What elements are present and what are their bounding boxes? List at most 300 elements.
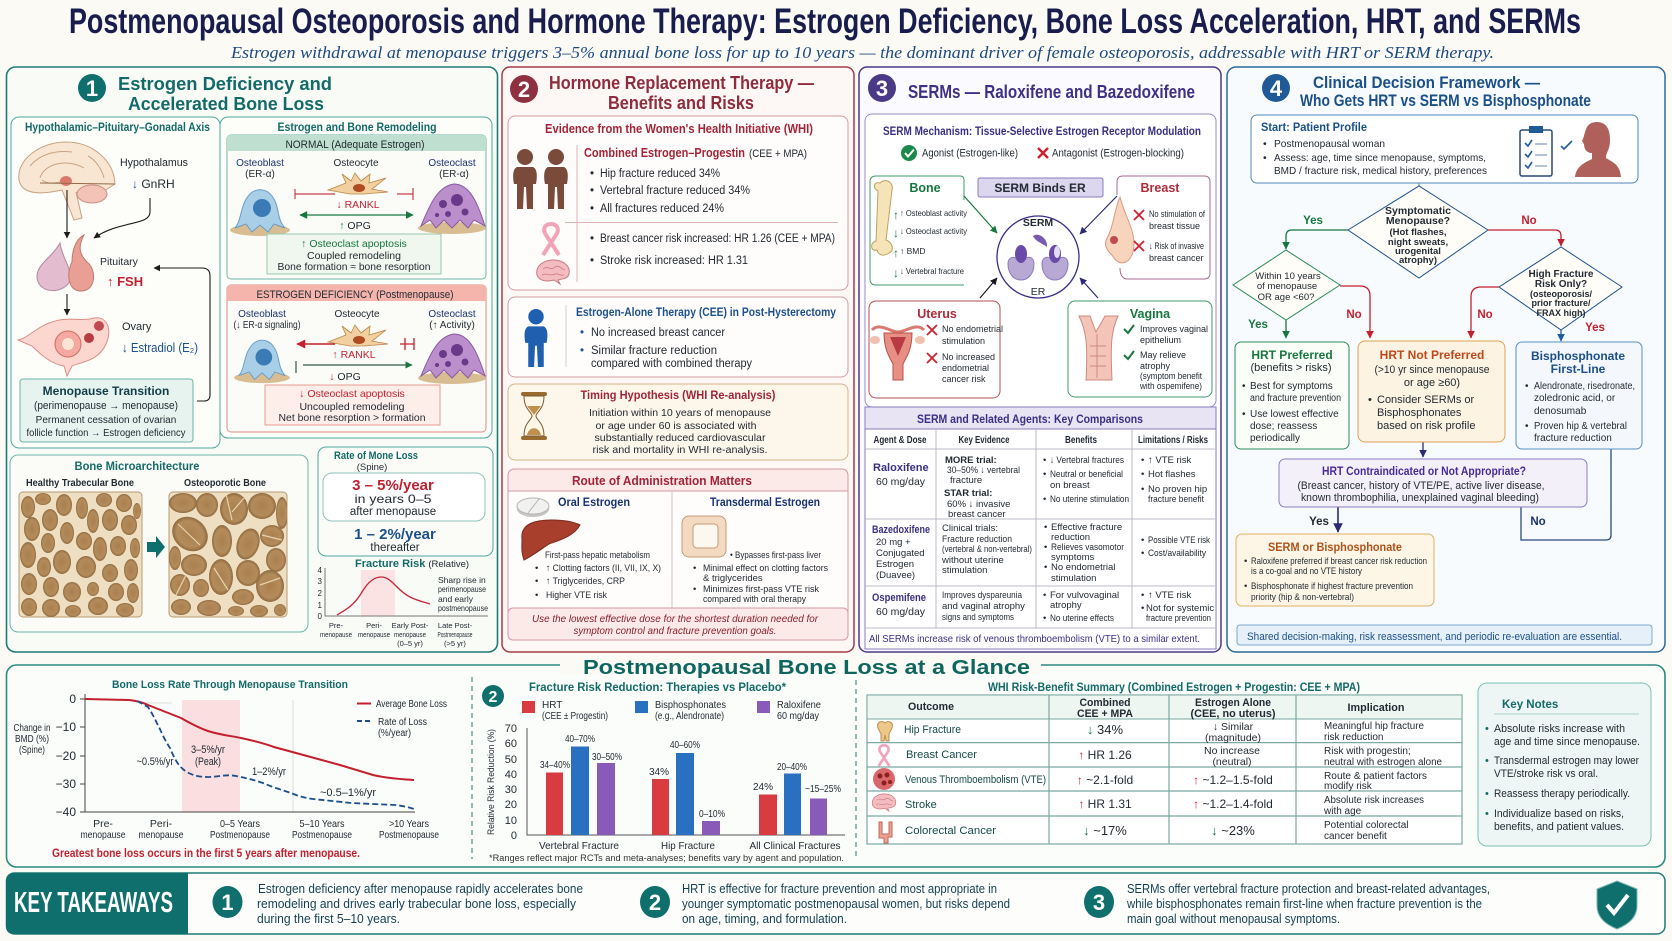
breast tissue card [1106, 176, 1210, 279]
bar chart: fracture risk reduction: 34% [649, 767, 669, 778]
bone tissue card: ↓ Osteoclast activity [900, 226, 968, 236]
icon: brain [19, 142, 115, 220]
WHI risk-benefit table: ↓ 34% [1087, 722, 1124, 737]
WHI risk-benefit table: Potential colorectal [1324, 820, 1408, 831]
fracture risk chart: Early Post- [392, 621, 429, 630]
decision: high fracture risk: High Fracture [1528, 269, 1594, 280]
key notes box: age and time since menopause. [1494, 736, 1640, 748]
rate of bone loss box: 3 – 5%/year [352, 477, 434, 494]
normal state: ↑ OPG [339, 220, 371, 232]
bone tissue card: Bone [909, 181, 941, 195]
bar chart: fracture risk reduction: 40 [505, 769, 517, 781]
normal state: ↓ RANKL [336, 199, 380, 211]
table row: ospemifene: and vaginal atrophy [942, 601, 1025, 612]
flowchart labels: Yes [1309, 516, 1329, 528]
takeaway 3: main goal without menopausal symptoms. [1127, 911, 1340, 926]
SERM binds ER label: SERM Binds ER [994, 181, 1086, 195]
SERM binds ER label [978, 178, 1103, 197]
table rows: Stroke [905, 799, 937, 811]
deficiency state: ESTROGEN DEFICIENCY (Postmenopause) [256, 289, 454, 301]
decision: within 10 years: OR age <60? [1258, 292, 1314, 303]
route of administration box: ↑ Triglycerides, CRP [546, 576, 625, 587]
pituitary label: ↑ FSH [107, 274, 143, 289]
SERM comparison table: Key Evidence [958, 434, 1010, 446]
rate of bone loss box: after menopause [350, 506, 436, 518]
takeaway 2: 2 [649, 890, 661, 915]
decision: symptomatic menopause: (Hot flashes, [1389, 227, 1447, 238]
SERM or bisphosphonate box: is a co-goal and no VTE history [1251, 566, 1362, 577]
outcome: bisphosphonate first-line: fracture reduction [1534, 433, 1612, 444]
table row: bazedoxifene: Relieves vasomotor [1051, 542, 1124, 553]
table row: ospemifene: fracture prevention [1146, 613, 1211, 624]
rate of bone loss box: in years 0–5 [354, 492, 432, 506]
patient profile box: Postmenopausal woman [1274, 138, 1385, 150]
decision: within 10 years: of menopause [1257, 281, 1317, 292]
key notes box: Key Notes [1502, 699, 1558, 711]
takeaway 2: younger symptomatic postmenopausal women, but risks depend [682, 896, 1010, 911]
outcome: bisphosphonate first-line [1516, 342, 1642, 449]
fracture risk chart: Peri- [366, 621, 382, 630]
timing hypothesis box [508, 384, 848, 460]
fracture risk chart: 3 [318, 577, 323, 586]
healthy trabecular bone image [19, 492, 142, 617]
fracture risk chart: 2 [318, 589, 323, 598]
normal state [227, 135, 486, 279]
normal state: (ER-α) [245, 169, 275, 180]
key notes box: • [1485, 788, 1489, 800]
bar chart: fracture risk reduction: All Clinical Fractures [750, 840, 840, 852]
flowchart labels: Yes [1248, 319, 1268, 331]
rate of bone loss box: (Spine) [357, 462, 387, 473]
panel 1 heading: Estrogen Deficiency and [118, 74, 332, 94]
bone tissue card: ↑ BMD [900, 246, 926, 256]
menopause transition box: Menopause Transition [43, 384, 169, 398]
table row: ospemifene: ↑ VTE risk [1148, 590, 1192, 601]
WHI evidence box: Combined Estrogen–Progestin [584, 146, 745, 160]
table row: bazedoxifene: Cost/availability [1148, 548, 1206, 559]
table row: ospemifene: • [1043, 590, 1046, 601]
line chart legend: (%/year) [378, 728, 411, 739]
HRT contraindicated box [1279, 459, 1587, 507]
table row: bazedoxifene: • [1044, 542, 1047, 553]
deficiency state: (↑ Activity) [429, 320, 475, 331]
WHI risk-benefit table: ↓ ~23% [1211, 823, 1255, 838]
table row: ospemifene: • [1141, 603, 1144, 614]
line chart: bone loss rate: Pre- [93, 818, 113, 830]
outcome: HRT preferred: • [1242, 381, 1246, 392]
table row: bazedoxifene: symptoms [1051, 552, 1095, 563]
patient profile box: Assess: age, time since menopause, symptoms, [1274, 152, 1486, 164]
outcome: bisphosphonate first-line: Bisphosphonate [1531, 349, 1625, 363]
table row: bazedoxifene: • [1141, 535, 1144, 546]
osteoporotic bone image [165, 492, 288, 617]
deficiency state: ↓ OPG [329, 371, 361, 383]
flowchart labels: Yes [1303, 215, 1323, 227]
bar chart: fracture risk reduction: 34–40% [540, 760, 570, 771]
table rows: Breast Cancer [906, 749, 977, 761]
table row: raloxifene: Neutral or beneficial [1050, 469, 1123, 480]
table row: bazedoxifene: stimulation [1051, 573, 1096, 584]
line chart: bone loss rate: menopause [138, 829, 184, 841]
bone microarchitecture box: Bone Microarchitecture [74, 459, 200, 473]
icon: hourglass [521, 392, 547, 440]
table row: ospemifene: No uterine effects [1050, 613, 1114, 624]
WHI risk-benefit table: ↓ Similar [1213, 721, 1254, 733]
WHI risk-benefit table: Risk with progestin; [1324, 746, 1411, 757]
SERM or bisphosphonate box: • [1244, 556, 1247, 567]
line chart: bone loss rate: 0–5 Years [220, 818, 260, 830]
decision: within 10 years [1233, 250, 1340, 320]
WHI risk-benefit table: ↑ HR 1.26 [1078, 748, 1132, 762]
bar chart: fracture risk reduction: 20–40% [777, 762, 807, 773]
hypothalamus label: ↓ GnRH [132, 177, 175, 191]
decision: high fracture risk: FRAX high) [1536, 308, 1586, 318]
table row: ospemifene: signs and symptoms [942, 612, 1014, 623]
line chart: bone loss rate: BMD (%) [15, 734, 49, 745]
outcome: HRT preferred: HRT Preferred [1251, 348, 1333, 362]
rate of bone loss box: Rate of Mone Loss [334, 450, 418, 462]
arrows to receptor [964, 196, 1117, 298]
table header: CEE + MPA [1077, 708, 1133, 720]
route of administration box: • [693, 563, 696, 574]
takeaway 3: SERMs offer vertebral fracture protection and breast-related advantages, [1127, 881, 1490, 896]
bone tissue card: ↑ Osteoblast activity [900, 208, 968, 218]
table rows [904, 724, 1046, 837]
table row: bazedoxifene: Bazedoxifene [872, 524, 930, 536]
route of administration box: • [535, 590, 538, 601]
panel 1 badge: 1 [86, 76, 98, 101]
SERM or bisphosphonate box: priority (hip & non-vertebral) [1251, 592, 1354, 603]
breast tissue card: breast cancer [1149, 253, 1204, 263]
WHI risk-benefit table: (magnitude) [1205, 732, 1261, 744]
thin trabecular strands [176, 494, 282, 595]
patient profile box: Start: Patient Profile [1261, 120, 1367, 134]
table row: ospemifene: • [1043, 613, 1046, 624]
hypothalamus label [120, 157, 188, 191]
key notes box: Individualize based on risks, [1494, 808, 1624, 820]
takeaway 1: 1 [221, 890, 234, 915]
arrows [67, 190, 150, 315]
icon: vagina [1079, 316, 1118, 380]
key notes box: Transdermal estrogen may lower [1494, 755, 1639, 767]
route of administration box [508, 469, 848, 640]
decision: symptomatic menopause: Menopause? [1386, 215, 1450, 227]
flowchart labels: No [1477, 309, 1493, 321]
line chart: bone loss rate: 3–5%/yr [191, 744, 225, 756]
icon: breast [1106, 197, 1134, 263]
key notes box: • [1485, 808, 1489, 820]
outcome: bisphosphonate first-line: Proven hip & vertebral [1534, 421, 1627, 432]
table header: Implication [1348, 702, 1405, 714]
fracture risk chart: menopause [320, 630, 352, 639]
arrow: healthy to osteoporotic [147, 536, 165, 558]
outcome: HRT not preferred: Bisphosphonates [1377, 407, 1462, 419]
table row: raloxifene: • [1141, 469, 1144, 480]
line chart: bone loss rate: 5–10 Years [300, 818, 344, 830]
table row: raloxifene [873, 455, 1207, 520]
line chart: bone loss rate: Postmenopause [292, 829, 352, 841]
SERM comparison table: SERM and Related Agents: Key Comparisons [917, 412, 1143, 426]
bar chart: fracture risk reduction: 10 [505, 815, 517, 827]
uterus card: No increased [942, 352, 995, 362]
table row: bazedoxifene: • [1044, 562, 1047, 573]
table row: raloxifene: on breast [1050, 480, 1090, 491]
menopause transition box: follicle function → Estrogen deficiency [26, 428, 186, 439]
table row: bazedoxifene: No endometrial [1051, 562, 1115, 573]
WHI risk-benefit table: ↑ ~1.2–1.5-fold [1193, 773, 1273, 787]
route of administration box: Oral Estrogen [558, 495, 630, 509]
line chart: bone loss rate: ~0.5–1%/yr [320, 787, 376, 799]
fracture risk chart: (>5 yr) [444, 639, 466, 648]
bone tissue card: ↑ [893, 246, 899, 260]
table rows: Colorectal Cancer [905, 825, 996, 837]
line chart: bone loss rate: >10 Years [389, 818, 429, 830]
route of administration box: Higher VTE risk [546, 590, 607, 601]
bone tissue card: ↓ [893, 226, 899, 240]
route of administration box: • Bypasses first-pass liver [730, 550, 821, 561]
fracture risk chart: 0 [318, 612, 323, 621]
table row: bazedoxifene: without uterine [941, 555, 1004, 566]
table row: ospemifene: • [1141, 590, 1144, 601]
outcome: HRT preferred: • [1242, 409, 1246, 420]
icon: woman profile [1575, 122, 1621, 177]
WHI evidence box: Breast cancer risk increased: HR 1.26 (CEE + MPA) [600, 233, 835, 245]
table row: raloxifene: 60% ↓ invasive [947, 499, 1010, 510]
decision: symptomatic menopause: atrophy) [1399, 255, 1437, 266]
bar chart footnote: *Ranges reflect major RCTs and meta-analyses; benefits vary by agent and population. [489, 853, 844, 864]
table row: bazedoxifene: 20 mg + [876, 537, 911, 548]
table row: raloxifene: ↓ Vertebral fractures [1050, 455, 1124, 466]
table row: raloxifene: 30–50% ↓ vertebral [947, 465, 1020, 476]
normal state: NORMAL (Adequate Estrogen) [286, 139, 424, 151]
outcome: HRT preferred: Best for symptoms [1250, 381, 1333, 392]
decision: symptomatic menopause: night sweats, [1388, 237, 1448, 248]
line chart: bone loss rate: Postmenopause [210, 829, 270, 841]
decision: within 10 years: Within 10 years [1255, 271, 1321, 282]
normal state: (ER-α) [439, 169, 469, 180]
flowchart labels: Yes [1585, 322, 1605, 334]
table row: ospemifene: Improves dyspareunia [942, 590, 1023, 601]
vagina card: Vagina [1130, 307, 1171, 321]
timing hypothesis box: substantially reduced cardiovascular [594, 432, 766, 444]
outcome: bisphosphonate first-line: denosumab [1534, 406, 1587, 417]
legend: agonist, antagonist: Antagonist (Estrogen-blocking) [1052, 148, 1184, 160]
table row: raloxifene: No proven hip [1148, 484, 1207, 495]
WHI risk-benefit table: neutral with estrogen alone [1324, 757, 1442, 768]
table header: Estrogen Alone [1195, 697, 1271, 709]
normal state: Osteoblast [236, 158, 284, 169]
normal state: Coupled remodeling [307, 250, 401, 262]
fracture risk chart: Pre- [329, 621, 344, 630]
takeaway 3: 3 [1093, 890, 1105, 915]
table row: bazedoxifene: • [1044, 522, 1047, 533]
decision: symptomatic menopause: urogenital [1395, 246, 1441, 257]
panel 3 badge: 3 [876, 76, 888, 101]
key notes box: VTE/stroke risk vs oral. [1494, 768, 1598, 780]
WHI risk-benefit table: ↑ ~1.2–1.4-fold [1193, 797, 1273, 811]
bar chart legend: (CEE ± Progestin) [542, 711, 608, 722]
patient profile box: BMD / fracture risk, medical history, preferences [1274, 165, 1487, 177]
bar chart: fracture risk reduction: 40–60% [670, 740, 700, 751]
flowchart labels: No [1346, 309, 1362, 321]
line chart: bone loss rate: Bone Loss Rate Through Menopause Transition [112, 679, 348, 691]
bar chart: fracture risk reduction: 30 [505, 784, 517, 796]
italic note: symptom control and fracture prevention goals. [574, 625, 776, 637]
WHI evidence box: • [590, 185, 594, 197]
table row: bazedoxifene: Effective fracture [1051, 522, 1122, 533]
pituitary label [100, 256, 143, 289]
table row: bazedoxifene: • [1141, 548, 1144, 559]
SERM comparison table: Benefits [1065, 434, 1097, 446]
table rows: Venous Thromboembolism (VTE) [905, 774, 1046, 786]
outcome: HRT preferred: periodically [1250, 433, 1300, 444]
table row: ospemifene [872, 590, 1214, 624]
shared decision-making note: Shared decision-making, risk reassessment, and periodic re-evaluation are essential. [1247, 631, 1622, 643]
fracture risk chart: Postmenopause [438, 630, 472, 639]
takeaway 2: on age, timing, and formulation. [682, 911, 847, 926]
subtitle: Estrogen withdrawal at menopause triggers 3–5% annual bone loss for up to 10 years — the dominant driver of female osteoporosis, addressable with HRT or SERM therapy. [230, 43, 1494, 62]
line chart: bone loss rate: 1–2%/yr [252, 766, 286, 778]
panel 1 heading [118, 74, 332, 114]
WHI risk-benefit table: ↓ ~17% [1083, 823, 1127, 838]
WHI evidence box: • [590, 255, 594, 267]
timing hypothesis box: Initiation within 10 years of menopause [589, 407, 771, 419]
glance panel [6, 657, 1665, 867]
flowchart labels: No [1530, 516, 1546, 528]
bone tissue card: ↓ [893, 266, 899, 280]
rate of bone loss box: 1 – 2%/year [354, 526, 436, 543]
WHI evidence box: • [590, 168, 594, 180]
breast tissue card: ↓ Risk of invasive [1149, 241, 1204, 251]
bar chart: fracture risk reduction: 20 [505, 799, 517, 811]
deficiency state: (↓ ER-α signaling) [234, 320, 300, 331]
SERM or bisphosphonate box: SERM or Bisphosphonate [1268, 540, 1402, 554]
key notes box: Absolute risks increase with [1494, 723, 1625, 735]
icon: transdermal patch [682, 516, 726, 557]
line chart legend: Average Bone Loss [376, 699, 447, 710]
estrogen alone box: No increased breast cancer [591, 327, 725, 339]
table row: raloxifene: • [1043, 455, 1046, 466]
line chart: bone loss rate: menopause [80, 829, 126, 841]
bar chart legend: 60 mg/day [777, 711, 819, 722]
deficiency state [227, 285, 486, 432]
bar chart: fracture risk reduction: Relative Risk Reduction (%) [486, 729, 497, 835]
breast tissue card: breast tissue [1149, 221, 1200, 231]
key takeaways label: KEY TAKEAWAYS [14, 887, 173, 919]
table row: raloxifene: fracture benefit [1148, 494, 1204, 505]
line chart: bone loss rate: 0 [69, 692, 76, 706]
route of administration box: compared with oral therapy [703, 594, 806, 605]
fracture risk chart: menopause [394, 630, 426, 639]
uterus card [869, 301, 1003, 398]
line chart note: Greatest bone loss occurs in the first 5 years after menopause. [52, 848, 360, 860]
takeaway 1: remodeling and drives early trabecular bone loss, especially [257, 896, 576, 911]
panel 2: hormone replacement therapy [502, 67, 854, 652]
hypothalamus label: Hypothalamus [120, 157, 188, 169]
shared decision-making note [1237, 625, 1652, 645]
table row: ospemifene: 60 mg/day [876, 606, 926, 618]
route of administration box: ↑ Clotting factors (II, VII, IX, X) [546, 563, 661, 574]
normal state: Osteocyte [333, 158, 379, 169]
bone remodeling box [220, 117, 492, 438]
patient profile box: • [1263, 152, 1267, 164]
icon: uterus [870, 327, 925, 380]
deficiency state: Osteocyte [334, 309, 380, 320]
outcome: HRT preferred: Use lowest effective [1250, 409, 1339, 420]
bar chart: fracture risk reduction: 30–50% [592, 752, 622, 763]
table row: ospemifene: For vulvovaginal [1050, 590, 1119, 601]
table row: bazedoxifene [872, 522, 1210, 584]
glance heading: Postmenopausal Bone Loss at a Glance [583, 657, 1030, 679]
HPG axis box [11, 117, 220, 448]
WHI evidence box: Evidence from the Women's Health Initiative (WHI) [545, 122, 813, 136]
table row: raloxifene: 60 mg/day [876, 476, 926, 488]
deficiency state: Osteoblast [238, 309, 286, 320]
panel 4: clinical decision framework [1227, 67, 1665, 652]
deficiency state: Net bone resorption > formation [278, 412, 426, 424]
fracture risk chart: 4 [318, 566, 323, 575]
key notes box: Reassess therapy periodically. [1494, 788, 1630, 800]
flowchart labels [1248, 215, 1605, 528]
table row: bazedoxifene: Fracture reduction [942, 534, 1012, 545]
table row: raloxifene: MORE trial: [945, 455, 997, 466]
WHI evidence box: All fractures reduced 24% [600, 203, 724, 215]
rate of bone loss box [318, 447, 493, 556]
patient profile box [1251, 115, 1638, 183]
vagina card: epithelium [1140, 335, 1181, 345]
italic note: Use the lowest effective dose for the shortest duration needed for [532, 613, 818, 625]
takeaway 3 [1084, 881, 1490, 926]
key takeaways strip [6, 873, 1665, 934]
table row: raloxifene: ↑ VTE risk [1148, 455, 1192, 466]
outcome: HRT not preferred: (>10 yr since menopause [1374, 364, 1490, 376]
bar chart: fracture risk reduction: 2 [489, 689, 498, 706]
line chart legend: Rate of Loss [378, 717, 427, 728]
table row: bazedoxifene: Clinical trials: [942, 523, 998, 534]
table header: Outcome [908, 701, 954, 713]
menopause transition box: Permanent cessation of ovarian [36, 415, 176, 426]
fracture risk chart: (0–5 yr) [397, 639, 423, 648]
decision: symptomatic menopause: Symptomatic [1385, 205, 1451, 217]
HRT contraindicated box: (Breast cancer, history of VTE/PE, active liver disease, [1298, 480, 1544, 492]
outcome: bisphosphonate first-line: • [1525, 421, 1529, 432]
panel 2 badge [510, 75, 538, 103]
patient profile box: • [1263, 138, 1267, 150]
uterus card: No endometrial [942, 324, 1003, 334]
route of administration box: First-pass hepatic metabolism [545, 550, 650, 561]
WHI risk-benefit table: WHI Risk-Benefit Summary (Combined Estrogen + Progestin: CEE + MPA) [988, 682, 1360, 694]
bar chart: fracture risk reduction: 24% [753, 782, 773, 793]
panel 2 heading [549, 73, 814, 113]
bar chart legend: HRT [542, 700, 562, 711]
decision: symptomatic menopause [1348, 186, 1488, 278]
SERM mechanism box [865, 114, 1216, 407]
table row: bazedoxifene: (vertebral & non-vertebral) [942, 544, 1032, 555]
WHI risk-benefit table: Route & patient factors [1324, 771, 1427, 782]
table row: bazedoxifene: Estrogen [876, 559, 914, 570]
line chart: bone loss rate [14, 679, 447, 860]
WHI risk-benefit table: cancer benefit [1324, 831, 1387, 842]
icon: ovary [18, 318, 109, 376]
menopause transition box [20, 379, 193, 442]
pituitary label: Pituitary [100, 256, 139, 268]
icons: outcomes [872, 722, 896, 843]
ovary label: ↓ Estradiol (E₂) [122, 340, 198, 355]
icon: pituitary [37, 235, 94, 291]
timing hypothesis box: or age under 60 is associated with [596, 420, 757, 432]
WHI risk-benefit table: No increase [1204, 745, 1260, 757]
outcome: HRT not preferred [1358, 341, 1505, 442]
